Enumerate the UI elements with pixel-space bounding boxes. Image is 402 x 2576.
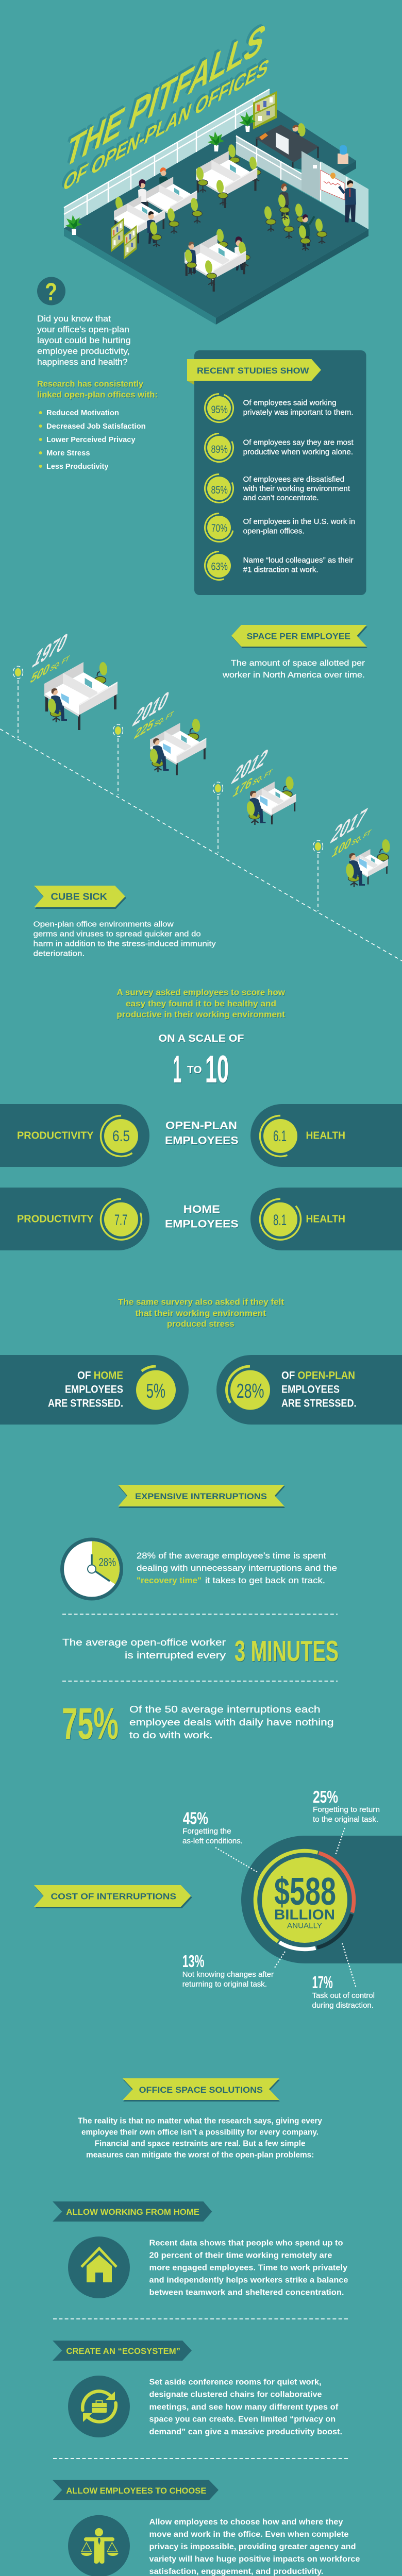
- interruption time text: "recovery time": [137, 1576, 202, 1585]
- working from home text: and independently helps workers strike a balance: [149, 2276, 348, 2285]
- stat 85%: Of employees are dissatisfied: [243, 476, 344, 484]
- survey intro: productive in their working environment: [116, 1010, 286, 1020]
- scale heading: 1: [173, 1047, 181, 1091]
- intro text: employee productivity,: [37, 347, 130, 356]
- panel: open-plan stress: ARE STRESSED.: [281, 1398, 357, 1410]
- chart: $588 billion ring: ANUALLY: [287, 1921, 322, 1930]
- ribbon: cost of interruptions: COST OF INTERRUPTIONS: [51, 1892, 176, 1902]
- panel: open-plan stress: 28%: [237, 1380, 264, 1402]
- stat 85%: [200, 469, 350, 507]
- cubicle cluster left with staff: [111, 167, 202, 260]
- panel: open-plan stress: [216, 1355, 402, 1425]
- icon: question mark: [37, 277, 65, 306]
- stat 95%: privately was important to them.: [243, 409, 354, 417]
- cubicle cluster right: [195, 144, 261, 208]
- timeline diagonal: [0, 729, 402, 961]
- callout 17%: during distraction.: [312, 2001, 374, 2010]
- panel: home stress: OF HOME: [77, 1370, 123, 1382]
- 2010: 225SQ. FT: [132, 703, 177, 742]
- ribbon: recent studies show: RECENT STUDIES SHOW: [197, 366, 310, 376]
- research heading: Research has consistently: [37, 379, 144, 388]
- title line 2: OF OPEN-PLAN OFFICES: [60, 54, 272, 197]
- bookshelf: [253, 91, 277, 129]
- panel: open-plan stress: OF OPEN-PLAN: [281, 1370, 355, 1382]
- callout 13%: Not knowing changes after: [182, 1970, 274, 1979]
- ribbon: cost of interruptions: [34, 1885, 192, 1908]
- bullet list: Decreased Job Satisfaction: [46, 422, 146, 431]
- ribbon: create an ecosystem: [53, 2341, 192, 2361]
- 75% stat: employee deals with daily have nothing: [129, 1717, 334, 1727]
- panel: recent studies: [187, 350, 366, 595]
- panel: open-plan health: [250, 1104, 402, 1167]
- stat 85%: with their working environment: [243, 485, 350, 493]
- cube sick text: germs and viruses to spread quicker and do: [34, 930, 201, 939]
- callout 45%: Forgetting the: [182, 1827, 231, 1836]
- ribbon: office space solutions: OFFICE SPACE SOLUTIONS: [139, 2085, 263, 2095]
- ribbon: allow employees to choose: ALLOW EMPLOYEES TO CHOOSE: [66, 2486, 206, 2496]
- water cooler: [338, 145, 348, 164]
- panel: open-plan productivity: PRODUCTIVITY: [17, 1130, 94, 1142]
- stat 95%: [201, 390, 354, 426]
- space per employee description: worker in North America over time.: [222, 671, 365, 680]
- stat 63%: 63%: [211, 561, 228, 573]
- choose text: variety will have huge positive impacts on workforce: [149, 2555, 360, 2564]
- survey intro: A survey asked employees to score how: [116, 988, 285, 997]
- interruption time text: dealing with unnecessary interruptions and the: [137, 1564, 337, 1573]
- panel: home health: [250, 1188, 402, 1250]
- ribbon: allow working from home: ALLOW WORKING FROM HOME: [66, 2207, 199, 2217]
- callout 13%: returning to original task.: [182, 1980, 267, 1989]
- 2017: 100SQ. FT: [330, 821, 375, 861]
- choose text: move and work in the office. Even when complete: [149, 2530, 349, 2539]
- whiteboard: [313, 165, 345, 200]
- research heading: [37, 379, 158, 400]
- ring segments: [237, 1832, 373, 1968]
- 75% stat: 75%: [62, 1699, 119, 1749]
- ribbon: create an ecosystem: CREATE AN “ECOSYSTEM”: [66, 2346, 180, 2356]
- panel: home stress: ARE STRESSED.: [48, 1398, 123, 1410]
- cube sick text: Open-plan office environments allow: [34, 920, 174, 929]
- panel: open-plan productivity: [0, 1104, 149, 1167]
- icon: house: [68, 2236, 130, 2298]
- callout 13%: [182, 1952, 274, 1989]
- label: open-plan employees: OPEN-PLAN: [165, 1120, 237, 1132]
- scale heading: ON A SCALE OF: [159, 1033, 244, 1044]
- panel: home health: HEALTH: [306, 1214, 345, 1225]
- survey intro: easy they found it to be healthy and: [126, 999, 276, 1009]
- 1970: [28, 627, 118, 730]
- panel: home stress: [0, 1355, 189, 1425]
- ecosystem text: [149, 2378, 342, 2436]
- title: [60, 13, 272, 197]
- scale heading: TO: [187, 1064, 202, 1076]
- ribbon: office space solutions: [123, 2078, 280, 2102]
- research heading: linked open-plan offices with:: [37, 391, 158, 400]
- cube sick text: harm in addition to the stress-induced immunity: [34, 940, 216, 948]
- icon: question mark: ?: [45, 279, 57, 306]
- choose text: [149, 2518, 360, 2576]
- floor slab: [64, 108, 368, 325]
- 75% stat: [62, 1699, 334, 1749]
- interruption time text: [137, 1551, 337, 1585]
- 1970: 1970: [29, 627, 72, 674]
- stat 63%: Name “loud colleagues” as their: [243, 556, 354, 565]
- cube sick text: deterioration.: [34, 950, 85, 958]
- 2010: [129, 685, 206, 775]
- clock 28%: [60, 1537, 123, 1600]
- interruption time text: it takes to get back on track.: [205, 1576, 325, 1585]
- 2012: 2012: [228, 743, 272, 790]
- plant: [208, 131, 224, 151]
- stat 63%: [201, 548, 354, 584]
- ribbon: expensive interruptions: EXPENSIVE INTERRUPTIONS: [135, 1492, 267, 1501]
- panel: home health: 8.1: [273, 1212, 287, 1229]
- 75% stat: Of the 50 average interruptions each: [129, 1704, 321, 1715]
- ribbon: expensive interruptions: [118, 1485, 285, 1508]
- ribbon: space per employee: SPACE PER EMPLOYEE: [247, 632, 350, 641]
- interruption time text: 28% of the average employee’s time is spent: [137, 1551, 326, 1561]
- 2017: [327, 802, 391, 887]
- callout 45%: 45%: [183, 1809, 208, 1828]
- cubicle cluster bottom with staff: [184, 228, 250, 292]
- callout 17%: [312, 1973, 375, 2010]
- panel: home productivity: 7.7: [114, 1212, 127, 1229]
- panel: home stress: EMPLOYEES: [65, 1384, 123, 1396]
- manager office: [255, 123, 319, 168]
- solutions intro: employee their own office isn’t a possibility for every company.: [81, 2128, 319, 2137]
- clock 28%: 28%: [99, 1555, 116, 1569]
- panel: open-plan stress: EMPLOYEES: [281, 1384, 340, 1396]
- bullet list: Less Productivity: [46, 463, 108, 471]
- 3 minutes stat: The average open-office worker: [62, 1637, 226, 1648]
- stat 89%: productive when working alone.: [243, 448, 353, 456]
- stat 95%: 95%: [211, 404, 228, 416]
- intro text: your office's open-plan: [37, 325, 129, 334]
- stat 70%: 70%: [211, 522, 227, 534]
- panel: open-plan health: HEALTH: [306, 1130, 345, 1142]
- callout 13%: 13%: [182, 1952, 204, 1971]
- choose text: satisfaction, engagement, and productivity.: [149, 2567, 324, 2576]
- working from home text: 20 percent of their time working remotely are: [149, 2251, 332, 2260]
- chart: $588 billion ring: $588: [274, 1870, 336, 1913]
- label: home employees: EMPLOYEES: [165, 1218, 239, 1230]
- callout 45%: [182, 1809, 243, 1845]
- bullet list: Lower Perceived Privacy: [46, 436, 136, 444]
- stat 89%: Of employees say they are most: [243, 439, 354, 447]
- stat 89%: 89%: [211, 444, 228, 455]
- label: home employees: [165, 1204, 239, 1230]
- ribbon: cube sick: CUBE SICK: [51, 892, 107, 902]
- space per employee description: [222, 659, 365, 680]
- stat 70%: Of employees in the U.S. work in: [243, 518, 355, 526]
- stat 70%: [202, 511, 355, 545]
- 3 minutes stat: is interrupted every: [125, 1650, 226, 1660]
- 3 minutes stat: 3 MINUTES: [234, 1635, 339, 1668]
- bullet list: More Stress: [46, 449, 90, 457]
- band: [241, 1836, 402, 1963]
- cube sick text: [34, 920, 216, 958]
- callout 17%: Task out of control: [312, 1991, 375, 2000]
- ribbon: allow working from home: [53, 2201, 212, 2222]
- label: home employees: HOME: [183, 1204, 220, 1215]
- panel: home productivity: PRODUCTIVITY: [17, 1214, 94, 1225]
- stress survey intro: The same survery also asked if they felt: [118, 1298, 284, 1307]
- working from home text: [149, 2239, 348, 2297]
- working from home text: between teamwork and sheltered concentration.: [149, 2289, 344, 2297]
- callout 25%: [313, 1787, 380, 1824]
- callout 17%: 17%: [312, 1973, 333, 1992]
- presenter: [339, 180, 356, 223]
- intro text: happiness and health?: [37, 358, 128, 367]
- callout 25%: 25%: [313, 1787, 338, 1806]
- scale heading: [159, 1033, 244, 1091]
- 2012: [228, 743, 296, 825]
- timeline: [0, 627, 402, 961]
- stress survey intro: produced stress: [167, 1319, 234, 1329]
- solutions intro: The reality is that no matter what the research says, giving every: [78, 2117, 322, 2126]
- stat 95%: Of employees said working: [243, 399, 337, 408]
- icon: briefcase cycle: [68, 2376, 130, 2437]
- chart: $588 billion ring: BILLION: [274, 1907, 335, 1923]
- ribbon: cube sick: [34, 886, 126, 909]
- timeline markers: [13, 666, 323, 911]
- ecosystem text: meetings, and see how many different types of: [149, 2403, 339, 2412]
- ribbon: recent studies show: [187, 359, 321, 385]
- 3 minutes stat: [62, 1635, 339, 1668]
- isometric office illustration: [64, 89, 368, 325]
- callout 25%: Forgetting to return: [313, 1805, 380, 1814]
- panel: open-plan health: 6.1: [273, 1128, 287, 1145]
- 1970: 500SQ. FT: [28, 647, 73, 687]
- stress survey intro: that their working environment: [136, 1309, 266, 1318]
- plant: [65, 215, 82, 235]
- ecosystem text: designate clustered chairs for collaborative: [149, 2391, 322, 2399]
- stat 63%: #1 distraction at work.: [243, 566, 319, 574]
- ecosystem text: demand” can give a massive productivity boost.: [149, 2428, 342, 2436]
- ribbon: allow employees to choose: [53, 2480, 219, 2500]
- working from home text: Recent data shows that people who spend up to: [149, 2239, 343, 2248]
- choose text: Allow employees to choose how and where they: [149, 2518, 343, 2527]
- solutions intro: [78, 2117, 322, 2160]
- solutions intro: Financial and space restraints are real. But a few simple: [95, 2140, 306, 2148]
- callout 25%: to the original task.: [313, 1815, 378, 1824]
- 2012: 176SQ. FT: [231, 761, 276, 801]
- meeting chairs and attendees: [263, 183, 327, 251]
- label: open-plan employees: [165, 1120, 239, 1147]
- scale heading: 10: [205, 1047, 229, 1091]
- solutions intro: measures can mitigate the worst of the open-plan problems:: [86, 2151, 314, 2160]
- panel: home productivity: [0, 1188, 149, 1250]
- partition wall: [236, 135, 368, 229]
- ecosystem text: Set aside conference rooms for quiet work,: [149, 2378, 322, 2386]
- stress survey intro: [118, 1298, 284, 1329]
- callout lines: [215, 1828, 356, 1987]
- callout 45%: as-left conditions.: [182, 1837, 243, 1845]
- back wall: [64, 89, 270, 228]
- icon: person with scales: [68, 2515, 130, 2576]
- stat 85%: and can’t concentrate.: [243, 494, 319, 502]
- ecosystem text: space you can create. Even limited “privacy on: [149, 2415, 336, 2424]
- working from home text: more engaged employees. Time to work privately: [149, 2264, 347, 2273]
- chart: $588 billion ring: [237, 1832, 402, 1968]
- bullet list: Reduced Motivation: [46, 409, 119, 417]
- panel: open-plan productivity: 6.5: [112, 1128, 130, 1145]
- 2017: 2017: [327, 802, 371, 850]
- space per employee description: The amount of space allotted per: [231, 659, 365, 668]
- intro text: [37, 314, 131, 367]
- stat 89%: [200, 429, 354, 467]
- panel: home stress: 5%: [146, 1380, 165, 1402]
- intro text: layout could be hurting: [37, 336, 131, 345]
- ribbon: space per employee: [231, 625, 367, 648]
- choose text: privacy is impossible, providing greater agency and: [149, 2543, 356, 2551]
- stat 70%: open-plan offices.: [243, 528, 305, 536]
- survey intro: [116, 988, 286, 1020]
- stat 85%: 85%: [211, 484, 228, 496]
- 2010: 2010: [129, 685, 173, 733]
- intro text: Did you know that: [37, 314, 111, 324]
- 75% stat: to do with work.: [129, 1730, 213, 1740]
- label: open-plan employees: EMPLOYEES: [165, 1135, 239, 1147]
- plant: [239, 112, 256, 132]
- bullet list: [39, 409, 146, 471]
